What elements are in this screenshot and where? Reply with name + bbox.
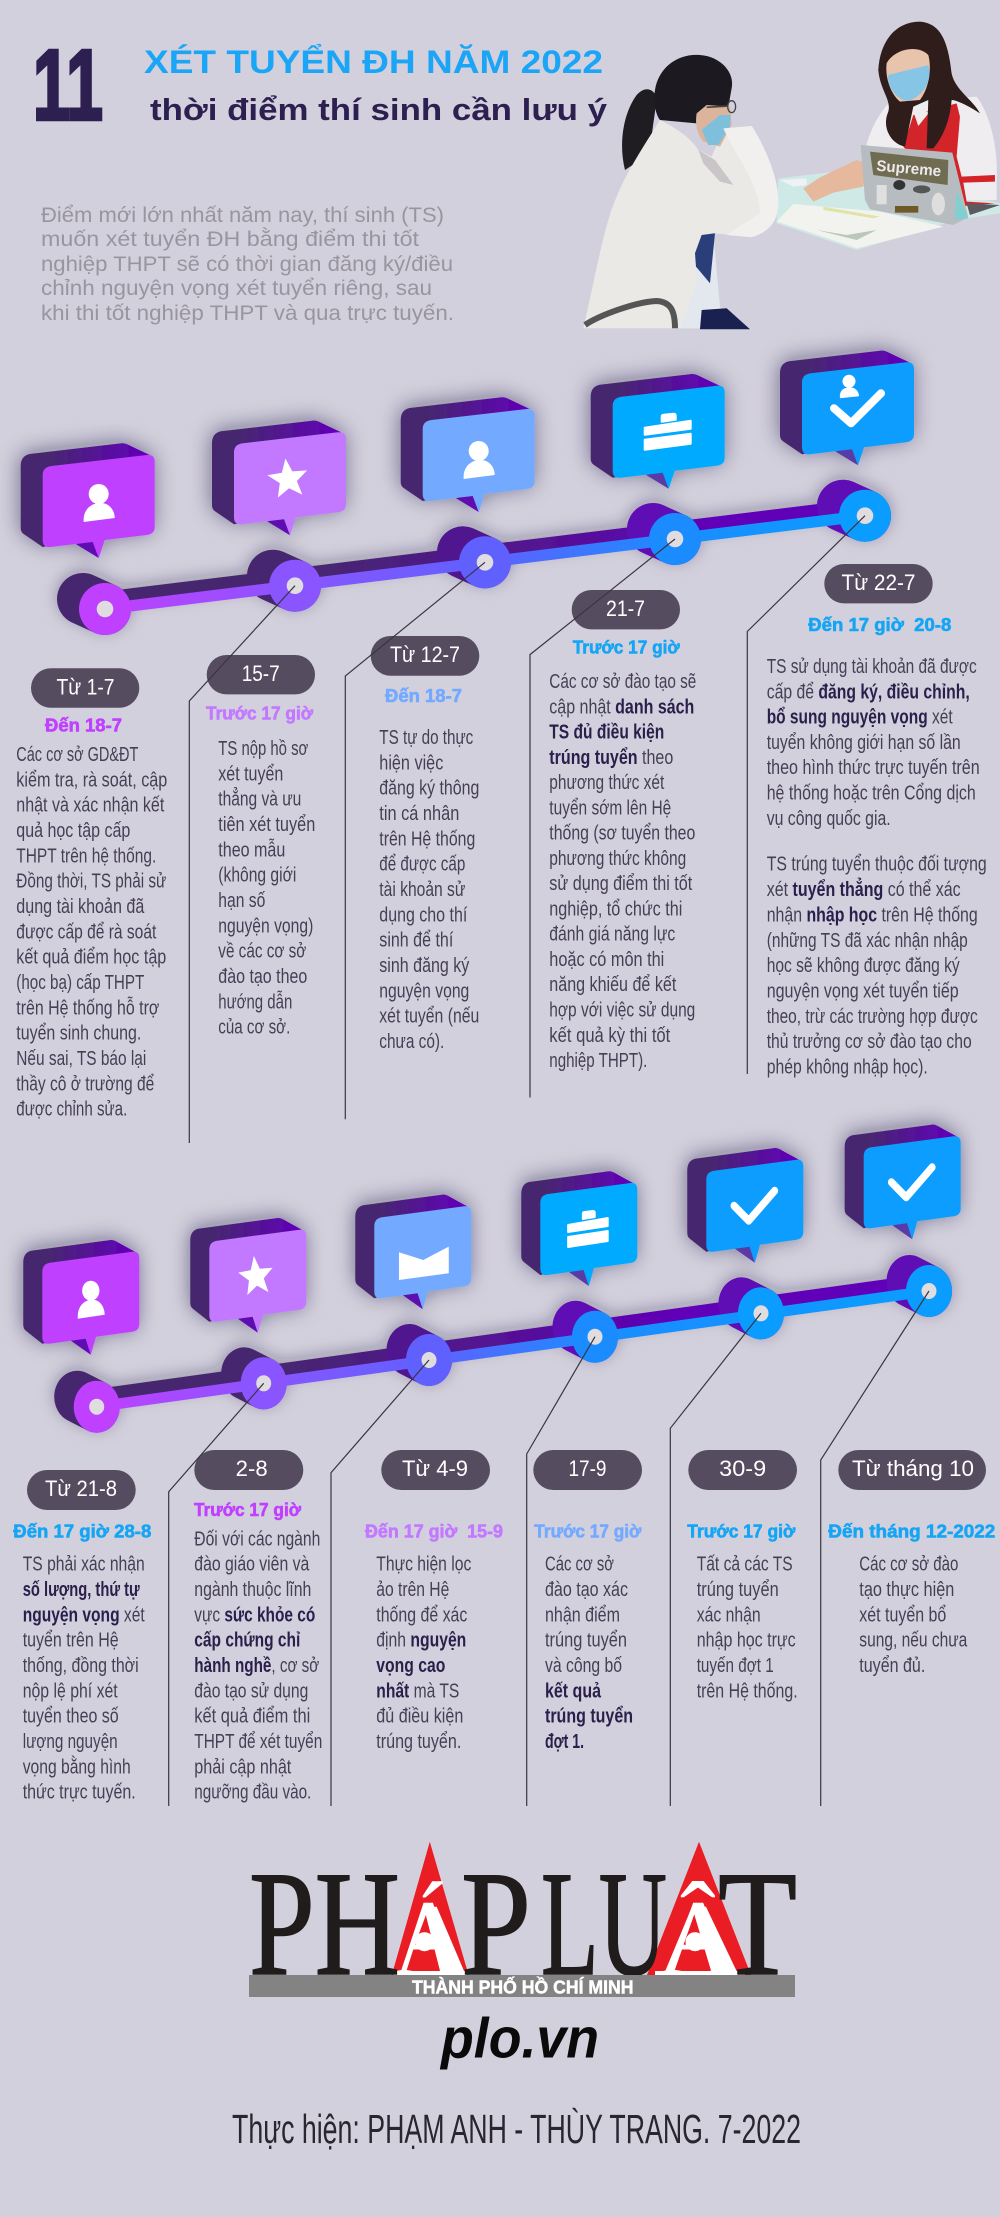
text block: 2-8: đào giáo viên và	[194, 1554, 310, 1576]
text block: 2-8: hành nghề, cơ sở	[194, 1655, 319, 1677]
text block: 2-8: phải cập nhật	[194, 1756, 292, 1778]
text block: Từ 12-7	[379, 727, 479, 1053]
text block: Từ 21-8: thức trực tuyến.	[23, 1782, 136, 1804]
intro paragraph: muốn xét tuyển ĐH bằng điểm thi tốt	[41, 228, 419, 251]
date pill: Từ 22-7	[824, 564, 933, 603]
text block: 21-7: hoặc có môn thi	[549, 949, 664, 971]
text block: Từ 21-8: TS phải xác nhận	[23, 1554, 145, 1576]
intro paragraph: chỉnh nguyện vọng xét tuyển riêng, sau	[41, 277, 432, 300]
deadline: Đến 18-7: Đến 18-7	[385, 686, 462, 706]
bubble 1: person	[23, 1240, 139, 1355]
text block: 2-8: ngành thuộc lĩnh	[194, 1579, 311, 1601]
text block: 17-9: đào tạo xác	[545, 1579, 628, 1601]
text block: Từ 12-7: chưa có).	[379, 1031, 444, 1053]
bubble 2: star	[212, 421, 346, 535]
text block: Từ 1-7: Đồng thời, TS phải sử	[16, 871, 166, 893]
text block: Từ 1-7	[16, 744, 167, 1121]
black letters: P	[461, 1841, 531, 2007]
text block: Từ 21-8: vọng bằng hình	[23, 1755, 131, 1778]
date pill: 17-9: 17-9	[568, 1456, 606, 1481]
text block: Từ tháng 10: tạo thực hiện	[859, 1579, 954, 1601]
text block: 15-7	[218, 738, 315, 1039]
date pill: Từ 12-7: Từ 12-7	[390, 642, 460, 667]
text block: 21-7: TS đủ điều kiện	[549, 722, 664, 744]
photo: student and counsellor at a table	[583, 22, 1000, 329]
date pill: 17-9	[533, 1450, 642, 1490]
text block: Từ tháng 10: tuyển đủ.	[859, 1655, 925, 1677]
text block: 21-7: cập nhật danh sách	[549, 696, 694, 718]
date pill: Từ 1-7: Từ 1-7	[56, 674, 114, 699]
text block: 21-7: nghiệp, tổ chức thi	[549, 898, 682, 920]
date pill: 2-8: 2-8	[236, 1456, 268, 1481]
bubble 4: briefcase	[591, 374, 725, 489]
text block: Từ 1-7: thầy cô ở trường để	[16, 1073, 154, 1095]
white letter A: Á	[393, 1879, 465, 1998]
bubble 1: person	[21, 443, 155, 558]
header	[33, 22, 1000, 329]
text block: 17-9: Các cơ sở	[545, 1554, 614, 1576]
text block: Từ 21-8: thống, đồng thời	[23, 1655, 139, 1677]
text block: Từ 1-7: kết quả điểm học tập	[16, 947, 166, 969]
big number 11: 11	[33, 30, 103, 142]
text block: Từ 12-7: dụng cho thí	[379, 904, 468, 926]
date pill: Từ 4-9	[381, 1450, 490, 1490]
title line 2: thời điểm thí sinh cần lưu ý	[150, 92, 608, 127]
text block: Từ 4-9: trúng tuyển.	[376, 1731, 461, 1753]
deadline: Đến 17 giờ 20-8: Đến 17 giờ 20-8	[808, 615, 951, 635]
white A strokes 1	[393, 1907, 467, 1975]
text block: Từ 22-7: nguyện vọng xét tuyển tiếp	[767, 980, 959, 1002]
text block: 17-9	[545, 1554, 633, 1753]
text block: 21-7: kết quả kỳ thi tốt	[549, 1025, 671, 1047]
text block: 2-8: ngưỡng đầu vào.	[194, 1782, 311, 1804]
bubble 6: check	[845, 1125, 961, 1239]
date pill: Từ 12-7	[371, 636, 479, 676]
text block: 17-9: trúng tuyển	[545, 1706, 633, 1728]
bubble 5: person with check	[780, 351, 914, 465]
text block: 21-7: sử dụng điểm thi tốt	[549, 873, 693, 895]
text block: Từ 1-7: Nếu sai, TS báo lại	[16, 1048, 146, 1070]
text block: 30-9: tuyến đợt 1	[697, 1655, 774, 1677]
text block: 17-9: đợt 1.	[545, 1731, 584, 1753]
title line 1: XÉT TUYỂN ĐH NĂM 2022	[144, 44, 603, 80]
text block: Từ 12-7: xét tuyển (nếu	[379, 1006, 479, 1028]
intro paragraph: khi thi tốt nghiệp THPT và qua trực tuyến.	[41, 302, 454, 325]
text block: 21-7	[549, 671, 696, 1072]
text block: Từ 12-7: tài khoản sử	[379, 879, 465, 901]
text block: Từ 1-7: được cấp để rà soát	[16, 921, 157, 943]
text block: Từ 4-9: ảo trên Hệ	[376, 1579, 449, 1601]
text block: 2-8: vực sức khỏe có	[194, 1604, 315, 1626]
text block: 15-7: theo mẫu	[218, 838, 285, 861]
black letters: PH	[249, 1841, 400, 2007]
logo band	[249, 1975, 795, 1997]
text block: Từ 1-7: THPT trên hệ thống.	[16, 845, 156, 867]
text block: Từ 22-7	[767, 656, 987, 1079]
text block: Từ 21-8: tuyển trên Hệ	[23, 1630, 119, 1652]
bubble 5: check	[687, 1148, 803, 1263]
logo subtitle: THÀNH PHỐ HỒ CHÍ MINH	[412, 1976, 634, 1997]
date pill: Từ 4-9: Từ 4-9	[402, 1456, 468, 1481]
text block: 21-7: phương thức xét	[549, 772, 665, 794]
text block: Từ 1-7: trên Hệ thống hỗ trợ	[16, 996, 159, 1019]
text block: Từ 1-7: quả học tập cấp	[16, 820, 130, 842]
text block: 15-7: thẳng và ưu	[218, 787, 301, 811]
date pill: 15-7	[207, 655, 315, 694]
text block: Từ 12-7: sinh để thí	[379, 930, 454, 952]
text block: 2-8: Đối với các ngành	[194, 1528, 320, 1550]
text block: 15-7: hạn số	[218, 890, 265, 912]
text block: 2-8: cấp chứng chỉ	[194, 1630, 301, 1652]
black letters	[249, 1841, 797, 2007]
text block: Từ 22-7: phép không nhập học).	[767, 1057, 928, 1079]
text block: 30-9: trên Hệ thống.	[697, 1680, 798, 1702]
text block: 21-7: thống (sơ tuyển theo	[549, 823, 695, 845]
date pill: 30-9: 30-9	[719, 1456, 766, 1481]
text block: Từ 21-8: số lượng, thứ tự	[23, 1579, 140, 1601]
text block: 2-8: kết quả điểm thi	[194, 1706, 310, 1728]
text block: 17-9: và công bố	[545, 1655, 622, 1677]
text block: 15-7: xét tuyển	[218, 763, 283, 785]
intro paragraph	[41, 204, 454, 325]
text block: Từ 22-7: nhận nhập học trên Hệ thống	[767, 904, 978, 926]
text block: Từ 1-7: dụng tài khoản đã	[16, 896, 145, 918]
date pill: 15-7: 15-7	[242, 661, 280, 686]
bubble 4: briefcase	[521, 1171, 637, 1286]
text block: Từ 12-7: trên Hệ thống	[379, 828, 475, 850]
text block: Từ 4-9: nhất mà TS	[376, 1680, 459, 1702]
text block: Từ 1-7: tuyển sinh chung.	[16, 1023, 141, 1045]
timeline bar 1	[79, 490, 891, 635]
deadline: Đến 17 giờ 28-8: Đến 17 giờ 28-8	[13, 1521, 151, 1541]
text block: 2-8	[194, 1528, 322, 1804]
panel: timeline 2 entries	[13, 1291, 995, 1806]
text block: 30-9: trúng tuyển	[697, 1579, 779, 1601]
text block: Từ 12-7: nguyện vọng	[379, 980, 469, 1002]
text block: 17-9: nhận điểm	[545, 1604, 620, 1626]
red triangle 2	[647, 1842, 751, 1975]
text block: Từ 1-7: nhật và xác nhận kết	[16, 795, 165, 817]
bubble 3: person	[401, 397, 535, 512]
white A strokes 2	[655, 1907, 745, 1975]
text block: Từ 4-9: đủ điều kiện	[376, 1706, 463, 1728]
text block: Từ tháng 10	[859, 1554, 968, 1677]
deadline: Trước 17 giờ: Trước 17 giờ	[687, 1521, 795, 1541]
intro paragraph: Điểm mới lớn nhất năm nay, thí sinh (TS)	[41, 204, 444, 227]
text block: Từ 4-9	[376, 1554, 471, 1753]
text block: Từ 22-7: bổ sung nguyện vọng xét	[767, 707, 953, 729]
text block: Từ 4-9: Thực hiện lọc	[376, 1554, 471, 1576]
text block: Từ 4-9: định nguyện	[376, 1630, 466, 1652]
text block: Từ tháng 10: sung, nếu chưa	[859, 1630, 968, 1652]
bubble 3: envelope	[355, 1195, 471, 1309]
text block: 15-7: hướng dẫn	[218, 990, 292, 1013]
date pill: 21-7	[572, 590, 680, 629]
deadline: Đến 17 giờ 15-9: Đến 17 giờ 15-9	[365, 1521, 503, 1541]
text block: Từ 21-8: nguyện vọng xét	[23, 1604, 145, 1626]
text block: 2-8: đào tạo sử dụng	[194, 1680, 308, 1702]
date pill: 21-7: 21-7	[606, 596, 645, 621]
text block: 15-7: đào tạo theo	[218, 966, 307, 988]
logo: Pháp Luật TP.HCM	[249, 1841, 797, 2007]
date pill: Từ 22-7: Từ 22-7	[842, 570, 916, 595]
panel: timeline 2 graphic	[23, 1125, 961, 1433]
text block: Từ 12-7: sinh đăng ký	[379, 955, 469, 977]
text block: 15-7: (không giới	[218, 865, 296, 887]
panel: timeline 1 graphic	[21, 351, 914, 635]
text block: Từ 21-8: nộp lệ phí xét	[23, 1680, 118, 1702]
deadline: Đến tháng 12-2022: Đến tháng 12-2022	[828, 1521, 995, 1541]
deadline: Trước 17 giờ: Trước 17 giờ	[206, 703, 313, 723]
text block: 21-7: năng khiếu để kết	[549, 974, 677, 996]
white letter A with marks: Ậ	[660, 1879, 738, 1998]
date pill: Từ 21-8: Từ 21-8	[45, 1476, 117, 1501]
date pill: Từ tháng 10: Từ tháng 10	[852, 1456, 974, 1481]
text block: Từ 22-7: vụ công quốc gia.	[767, 808, 891, 830]
deadline: Trước 17 giờ: Trước 17 giờ	[534, 1521, 641, 1541]
date pill: Từ 1-7	[31, 668, 139, 708]
text block: 21-7: trúng tuyển theo	[549, 747, 673, 769]
text block: Từ 1-7: kiểm tra, rà soát, cập	[16, 769, 167, 791]
text block: Từ 1-7: Các cơ sở GD&ĐT	[16, 744, 138, 766]
deadline: Trước 17 giờ: Trước 17 giờ	[573, 637, 680, 657]
date pill: Từ 21-8	[27, 1470, 136, 1510]
deadline: Đến 18-7: Đến 18-7	[45, 716, 122, 736]
text block: 21-7: phương thức không	[549, 848, 686, 870]
date pill: 30-9	[688, 1450, 797, 1490]
text block: Từ 21-8	[23, 1554, 145, 1804]
connector lines 2	[169, 1291, 929, 1806]
text block: Từ 12-7: tin cá nhân	[379, 803, 459, 825]
text block: 21-7: Các cơ sở đào tạo sẽ	[549, 671, 696, 693]
text block: 30-9: xác nhận	[697, 1604, 761, 1626]
text block: 15-7: tiên xét tuyển	[218, 814, 315, 836]
black letters: LU	[541, 1841, 667, 2007]
text block: Từ tháng 10: Các cơ sở đào	[859, 1554, 958, 1576]
text block: Từ 4-9: thống để xác	[376, 1604, 467, 1626]
text block: Từ 22-7: xét tuyển thẳng có thể xác	[767, 877, 961, 901]
text block: Từ 12-7: TS tự do thực	[379, 727, 473, 749]
text block: 21-7: nghiệp THPT).	[549, 1050, 647, 1072]
timeline bar 2	[74, 1265, 952, 1433]
text block: Từ 21-8: tuyển theo số	[23, 1706, 119, 1728]
text block: 21-7: hợp với việc sử dụng	[549, 1000, 695, 1022]
date pill: Từ tháng 10	[838, 1450, 986, 1490]
deadline: Trước 17 giờ: Trước 17 giờ	[194, 1500, 301, 1520]
text block: Từ 1-7: (học bạ) cấp THPT	[16, 972, 144, 994]
text block: 15-7: TS nộp hồ sơ	[218, 738, 308, 760]
connector lines 1	[189, 516, 865, 1143]
photo: student and counsellor at a table: Supreme	[876, 158, 942, 180]
text block: Từ 1-7: được chỉnh sửa.	[16, 1099, 127, 1121]
text block: Từ 21-8: lượng nguyện	[23, 1731, 118, 1753]
text block: 15-7: về các cơ sở	[218, 941, 306, 963]
date pill: 2-8	[194, 1450, 303, 1490]
text block: Từ 12-7: đăng ký thông	[379, 778, 479, 800]
text block: 15-7: nguyện vọng)	[218, 915, 313, 937]
text block: Từ 4-9: vọng cao	[376, 1655, 445, 1677]
text block: 15-7: của cơ sở.	[218, 1017, 290, 1039]
red triangle 1	[392, 1842, 469, 1975]
text block: 21-7: tuyển sớm lên Hệ	[549, 797, 671, 819]
text block: 21-7: đánh giá năng lực	[549, 924, 675, 946]
bubble 2: star	[190, 1218, 306, 1333]
text block: 30-9: nhập học trực	[697, 1630, 796, 1652]
website: plo.vn	[439, 2007, 599, 2071]
black letters: T	[718, 1841, 797, 2007]
text block: 30-9	[697, 1554, 798, 1702]
text block: 30-9: Tất cả các TS	[697, 1554, 793, 1576]
panel: timeline 1 entries	[16, 516, 987, 1143]
text block: 2-8: THPT để xét tuyển	[194, 1731, 322, 1753]
text block: Từ tháng 10: xét tuyển bổ	[859, 1604, 946, 1626]
text block: Từ 12-7: hiện việc	[379, 752, 443, 774]
text block: 17-9: trúng tuyển	[545, 1630, 627, 1652]
intro paragraph: nghiệp THPT sẽ có thời gian đăng ký/điều	[41, 253, 453, 276]
text block: 17-9: kết quả	[545, 1680, 602, 1702]
text block: Từ 12-7: để được cấp	[379, 854, 465, 876]
